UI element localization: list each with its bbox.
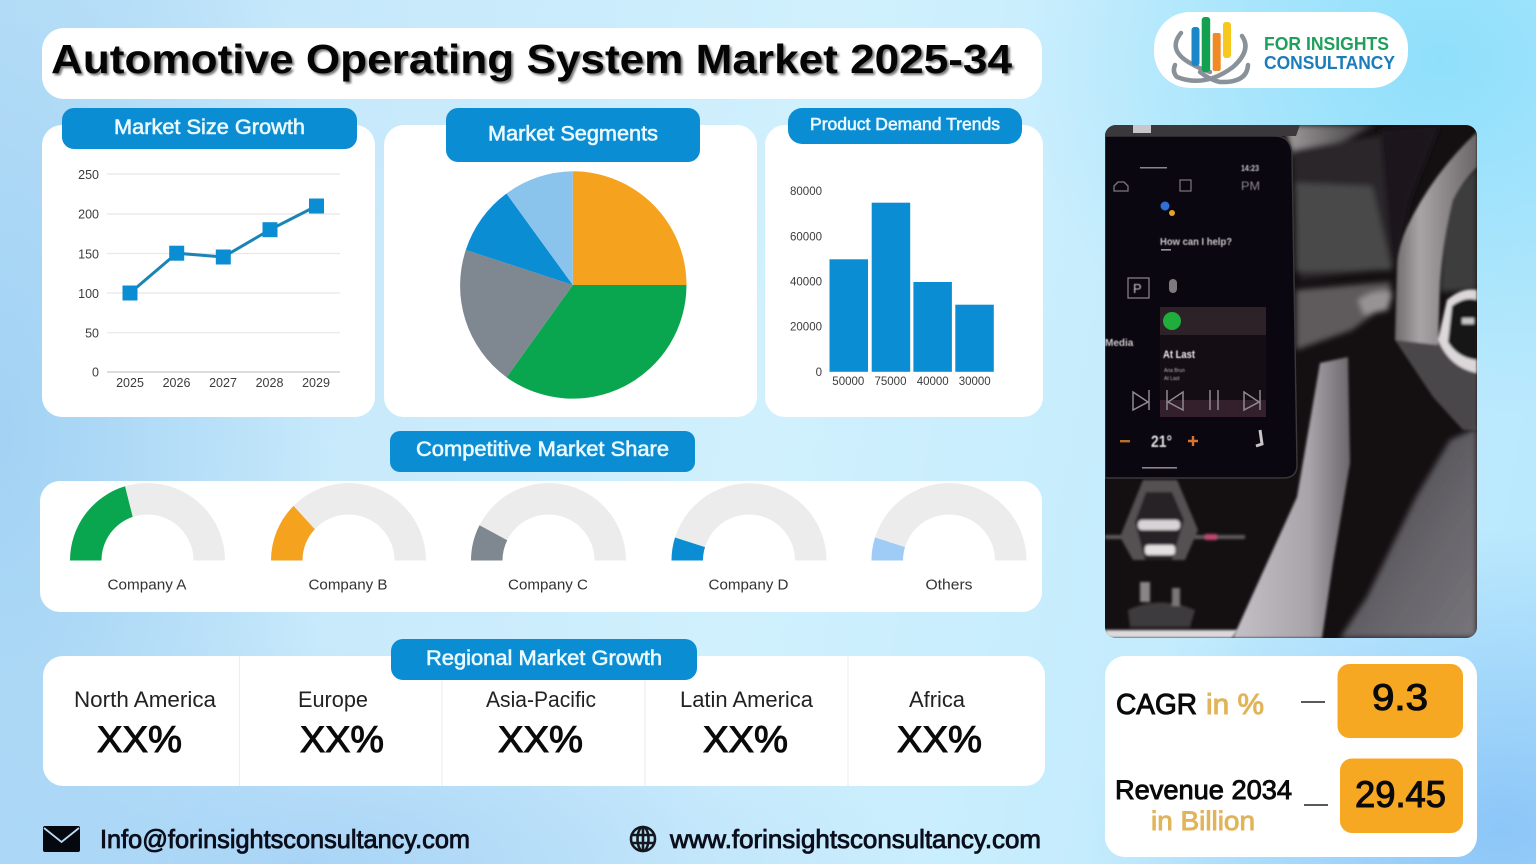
bar chart: 50000 (832, 376, 864, 388)
cagr label: in % (1206, 689, 1264, 721)
region: north america: XX% (97, 719, 182, 760)
footer email: Info@forinsightsconsultancy.com (100, 824, 470, 854)
gauge: company b: Company B (308, 578, 388, 594)
infotainment screen: At Last (1163, 349, 1195, 361)
line chart (78, 168, 340, 390)
steering wheel (1395, 132, 1477, 430)
gauge: company b (271, 483, 426, 594)
title: Automotive Operating System Market 2025-34 (51, 36, 1012, 82)
bar chart (790, 186, 994, 388)
logo: CONSULTANCY (1264, 53, 1395, 73)
region: europe (298, 687, 384, 760)
region: europe: XX% (300, 719, 384, 760)
infotainment screen: Media (1105, 338, 1134, 349)
line chart: 50 (85, 326, 99, 340)
line chart: 2026 (163, 376, 190, 390)
icon: envelope (43, 826, 80, 852)
infotainment screen: 21° (1151, 432, 1172, 451)
panel: cagr and revenue (1105, 656, 1477, 857)
panel: competitive market share gauges (40, 481, 1042, 612)
gauge: company a: Company A (108, 578, 187, 594)
heading: market segments (446, 108, 700, 162)
line chart: 0 (92, 366, 99, 380)
line chart: 2025 (116, 376, 144, 390)
pillar (1233, 357, 1350, 638)
panel: market segments (384, 108, 757, 417)
footer website: www.forinsightsconsultancy.com (669, 824, 1041, 854)
heading: competitive market share (390, 431, 695, 472)
region: north america (74, 687, 217, 760)
bar chart: 0 (816, 367, 822, 379)
infotainment screen: At Last (1164, 376, 1180, 382)
region: north america: North America (74, 687, 217, 712)
gauge: others (872, 483, 1026, 594)
region: asia-pacific: Asia-Pacific (486, 687, 596, 712)
line chart: 200 (78, 208, 99, 222)
cagr label: CAGR (1116, 689, 1197, 721)
gauge: company d: Company D (708, 578, 788, 594)
bar chart: 40000 (790, 276, 822, 288)
revenue label: Revenue 2034 (1115, 775, 1292, 805)
cagr value (1338, 664, 1463, 738)
bar chart: 20000 (790, 322, 822, 334)
line chart: 2027 (209, 376, 237, 390)
bar chart: 40000 (917, 376, 949, 388)
region: africa (897, 687, 982, 760)
revenue value: 29.45 (1355, 774, 1446, 815)
panel: market size growth (42, 108, 375, 417)
panel: product demand trends (765, 108, 1043, 417)
center console (1105, 480, 1245, 638)
region: africa: XX% (897, 719, 982, 760)
line chart: 2029 (302, 376, 330, 390)
line chart: 2028 (256, 376, 283, 390)
revenue value (1340, 758, 1463, 833)
logo: FOR INSIGHTS (1264, 34, 1389, 54)
dashboard (1285, 125, 1477, 350)
region: latin america: Latin America (680, 687, 814, 712)
photo: car infotainment interior (1105, 125, 1477, 638)
infotainment screen: 14:23 (1241, 164, 1259, 173)
panel: regional market growth (43, 656, 1045, 786)
title panel (42, 28, 1042, 99)
bar chart: 30000 (959, 376, 991, 388)
infotainment screen: Ana Brun (1164, 368, 1185, 374)
heading: competitive market share: Competitive Market Share (416, 438, 669, 461)
region: europe: Europe (298, 687, 368, 712)
heading: market size growth: Market Size Growth (114, 116, 305, 139)
heading: product demand trends (788, 108, 1022, 144)
line chart: 250 (78, 168, 99, 182)
gauge: company a (70, 483, 225, 594)
seat (1340, 428, 1477, 638)
infotainment screen: PM (1241, 179, 1260, 193)
infotainment screen (1105, 125, 1300, 478)
gauge: company d (672, 483, 826, 594)
revenue label: in Billion (1151, 806, 1255, 836)
cagr value: 9.3 (1372, 677, 1428, 718)
gauge: company c: Company C (508, 578, 588, 594)
region: asia-pacific: XX% (498, 719, 583, 760)
infotainment screen: P (1133, 281, 1142, 296)
heading: regional market growth (391, 639, 697, 680)
revenue label (1115, 775, 1292, 836)
pie chart (460, 171, 686, 399)
line chart: 100 (78, 287, 99, 301)
gauge: others: Others (926, 578, 972, 594)
bar chart: 80000 (790, 186, 822, 198)
infotainment screen: How can I help? (1160, 237, 1232, 248)
cagr label (1116, 689, 1264, 721)
gauge: company c (471, 483, 626, 594)
icon: globe (631, 827, 655, 851)
heading: product demand trends: Product Demand Trends (810, 114, 1000, 134)
heading: market segments: Market Segments (488, 122, 658, 146)
icon: logo orbit (1174, 33, 1248, 82)
line chart: 150 (78, 248, 99, 262)
bar chart: 60000 (790, 232, 822, 244)
bar chart: 75000 (875, 376, 906, 388)
region: asia-pacific (486, 687, 596, 760)
region: latin america (680, 687, 814, 760)
heading: market size growth (62, 108, 357, 149)
heading: regional market growth: Regional Market Growth (426, 647, 662, 670)
region: latin america: XX% (703, 719, 788, 760)
logo (1154, 12, 1408, 88)
region: africa: Africa (909, 687, 966, 712)
